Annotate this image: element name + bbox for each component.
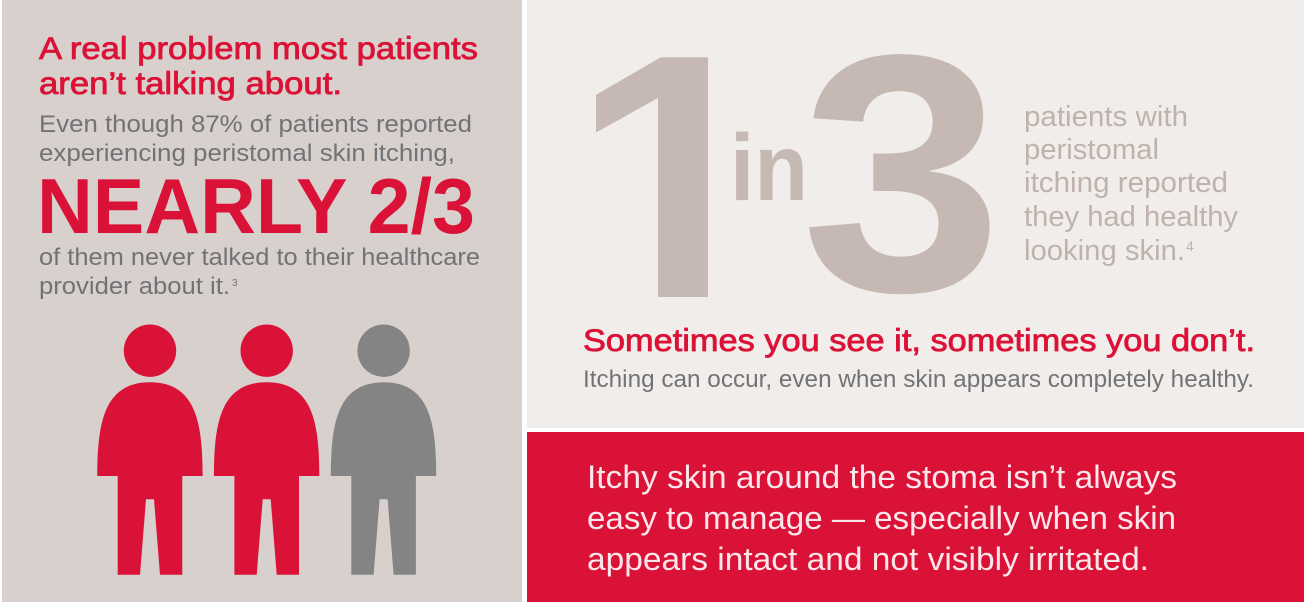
text block: healthy looking skin: itching reported (1024, 167, 1228, 199)
text block: itchy skin message: Itchy skin around the stoma isn’t always (587, 459, 1177, 495)
text block: healthy looking skin: they had healthy (1024, 201, 1239, 233)
panel: red callout (527, 432, 1304, 602)
text block: intro: Even though 87% of patients reported (39, 111, 472, 138)
heading: a real problem (39, 30, 478, 101)
text block: healthy looking skin: looking skin. (1024, 235, 1185, 267)
text block: itchy skin message (587, 459, 1177, 577)
heading: a real problem: aren’t talking about. (39, 65, 342, 101)
text block: healthy looking skin: patients with (1024, 101, 1188, 133)
icon: red person 1 (97, 324, 203, 575)
heading: sometimes you see it: Sometimes you see it, sometimes you don’t. (583, 322, 1255, 358)
text block: healthy looking skin (1024, 101, 1239, 267)
big statistic: 1 in 3 (596, 54, 990, 297)
text block: never talked: provider about it. (39, 273, 230, 300)
text block: never talked: of them never talked to their healthcare (39, 244, 480, 271)
text block: itchy skin message: easy to manage — especially when skin (587, 500, 1176, 536)
panel: left patients not talking (2, 0, 522, 602)
text block: never talked: 3 (232, 278, 238, 289)
text block: healthy looking skin: peristomal (1024, 134, 1159, 166)
text block: never talked (39, 244, 480, 300)
text block: intro: experiencing peristomal skin itching, (39, 140, 455, 167)
big statistic: nearly 2/3: NEARLY 2/3 (37, 162, 475, 250)
panel: one in three (527, 0, 1304, 428)
icon: gray person (331, 324, 436, 575)
text block: itching can occur: Itching can occur, even when skin appears completely healthy. (583, 366, 1254, 393)
text block: itchy skin message: appears intact and not visibly irritated. (587, 541, 1149, 577)
text block: healthy looking skin: 4 (1186, 238, 1194, 254)
big statistic: 1 in 3: in (730, 115, 808, 221)
icon: red person 2 (214, 324, 319, 575)
text block: intro (39, 111, 472, 167)
heading: a real problem: A real problem most patients (39, 30, 478, 66)
